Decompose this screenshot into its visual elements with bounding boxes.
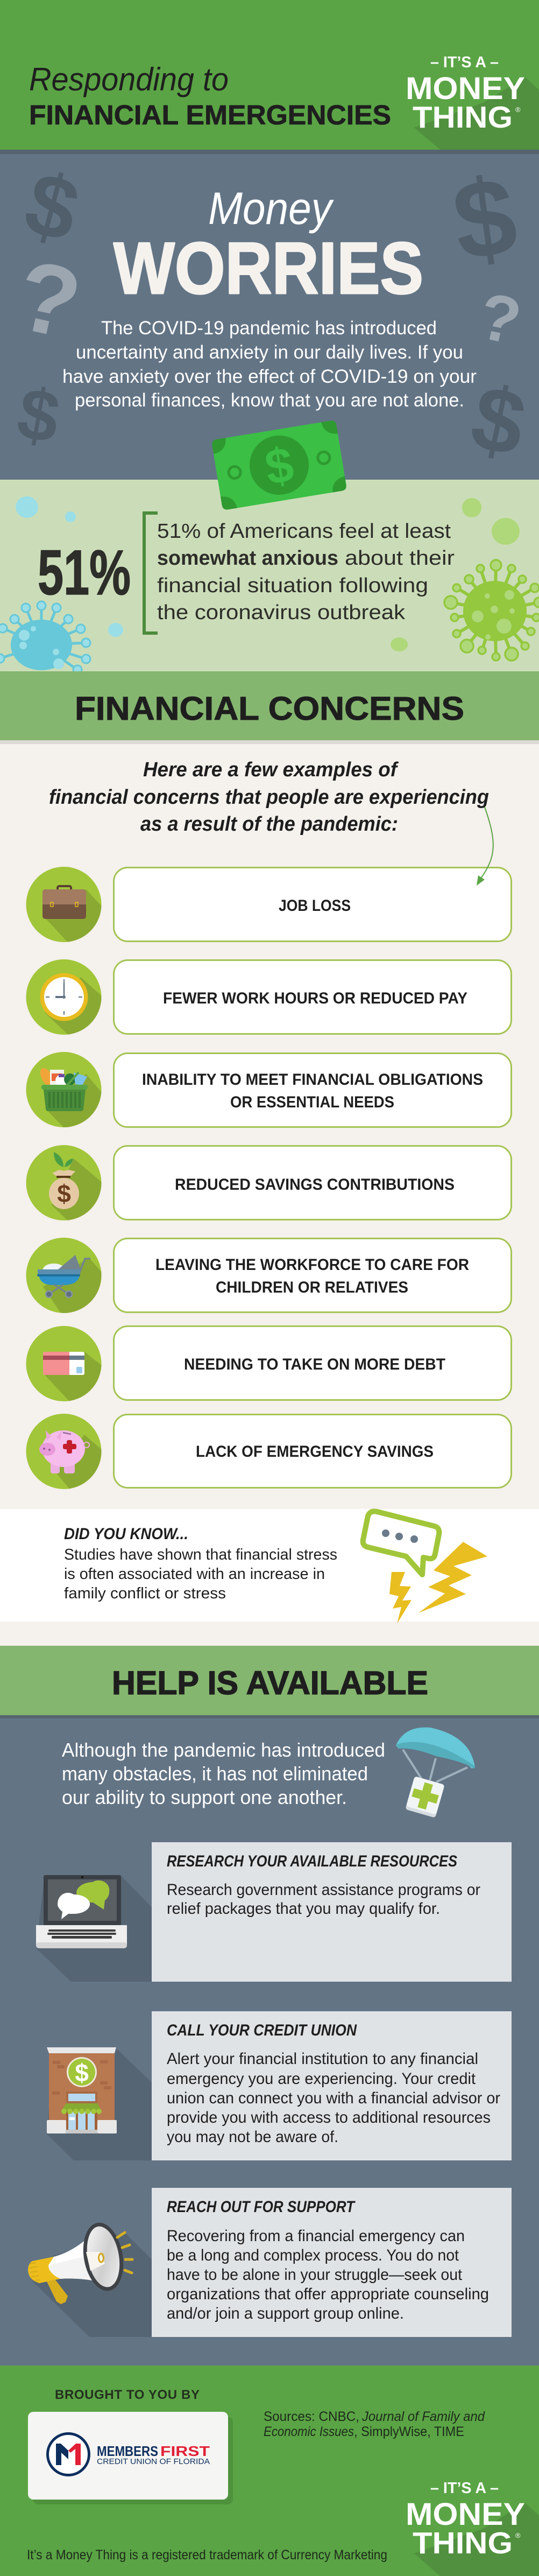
sources: , SimplyWise, TIME xyxy=(354,2424,464,2439)
decorative dollar signs and question marks: ? xyxy=(473,279,527,359)
intro text: financial concerns: financial concerns that people are experiencing xyxy=(49,786,489,809)
intro text: financial concerns: as a result of the pandemic: xyxy=(140,813,398,836)
card: needing more debt xyxy=(114,1326,511,1400)
intro paragraph: have anxiety over the effect of COVID-19 on your xyxy=(62,366,477,387)
intro paragraph: uncertainty and anxiety in our daily lives. If you xyxy=(76,342,463,363)
icon: laptop xyxy=(36,1875,152,1982)
icon: credit card xyxy=(26,1326,108,1402)
sources xyxy=(264,2409,485,2439)
card: lack of emergency savings: LACK OF EMERGENCY SAVINGS xyxy=(196,1443,434,1461)
icon: money bag xyxy=(26,1145,101,1220)
heading: money worries xyxy=(114,183,423,309)
credit union text xyxy=(167,2022,500,2146)
support text: organizations that offer appropriate counseling xyxy=(167,2285,489,2303)
statistic text xyxy=(157,520,455,624)
decorative dollar signs and question marks: $ xyxy=(12,372,66,459)
icon: dollar bill: $ xyxy=(261,437,297,495)
icon: credit union building: $ xyxy=(75,2059,89,2087)
intro text: help: our ability to support one another. xyxy=(62,1786,347,1808)
card: job loss: JOB LOSS xyxy=(279,897,351,915)
statistic text: financial situation following xyxy=(157,574,428,597)
card: inability to meet obligations: OR ESSENTIAL NEEDS xyxy=(230,1093,394,1111)
credit union text: union can connect you with a financial advisor or xyxy=(167,2089,500,2107)
intro text: financial concerns xyxy=(49,759,489,836)
decorative dollar signs and question marks: $ xyxy=(16,152,89,261)
did you know text xyxy=(64,1525,337,1602)
card: fewer hours: FEWER WORK HOURS OR REDUCED PAY xyxy=(163,989,467,1007)
decorative dollar signs and question marks: $ xyxy=(446,153,524,284)
icon: megaphone xyxy=(28,2220,152,2337)
heading band: help is available xyxy=(0,1646,539,1715)
research text: Research government assistance programs or xyxy=(167,1881,480,1899)
icon: dollar bill xyxy=(211,420,347,510)
bracket xyxy=(144,513,158,633)
logo: It's a Money Thing xyxy=(406,54,539,150)
icon: lightning bolts xyxy=(389,1542,487,1624)
credit union text: CALL YOUR CREDIT UNION xyxy=(167,2022,357,2039)
credit union text: provide you with access to additional resources xyxy=(167,2109,491,2126)
card: fewer hours xyxy=(114,960,511,1034)
support text: be a long and complex process. You do not xyxy=(167,2247,459,2264)
card: leaving the workforce: LEAVING THE WORKFORCE TO CARE FOR xyxy=(155,1256,469,1274)
intro paragraph: personal finances, know that you are not alone. xyxy=(75,390,464,411)
support text: have to be alone in your struggle—seek out xyxy=(167,2266,463,2284)
logo: It's a Money Thing footer: – IT’S A – xyxy=(430,2480,499,2497)
card: leaving the workforce xyxy=(114,1238,511,1312)
logo card: Members First: MEMBERS xyxy=(97,2443,158,2459)
icon: briefcase xyxy=(26,867,101,942)
logo card: Members First: CREDIT UNION OF FLORIDA xyxy=(97,2457,210,2466)
did you know text: DID YOU KNOW... xyxy=(64,1525,188,1543)
title: FINANCIAL EMERGENCIES xyxy=(29,100,391,130)
logo: It's a Money Thing: THING xyxy=(413,100,513,135)
statistic text: somewhat anxious xyxy=(157,547,338,570)
intro text: help xyxy=(62,1739,385,1808)
big number 51%: 51% xyxy=(38,537,131,608)
statistic text: 51% of Americans feel at least xyxy=(157,520,451,543)
panel: 51 percent statistic xyxy=(0,420,539,674)
card: inability to meet obligations: INABILITY TO MEET FINANCIAL OBLIGATIONS xyxy=(142,1071,483,1089)
icon: clock xyxy=(26,959,101,1035)
support text xyxy=(167,2198,489,2322)
panel: research resources xyxy=(36,1842,512,1982)
card: leaving the workforce: CHILDREN OR RELATIVES xyxy=(216,1279,408,1296)
research text xyxy=(167,1852,480,1918)
panel: did you know xyxy=(0,1509,539,1624)
statistic text: the coronavirus outbreak xyxy=(157,601,406,624)
support text: and/or join a support group online. xyxy=(167,2305,404,2322)
did you know text: is often associated with an increase in xyxy=(64,1566,325,1583)
logo: It's a Money Thing footer: MONEY xyxy=(406,2497,525,2532)
intro text: help: Although the pandemic has introduced xyxy=(62,1739,385,1761)
credit union text: Alert your financial institution to any financial xyxy=(167,2050,478,2068)
support text: REACH OUT FOR SUPPORT xyxy=(167,2198,356,2216)
card: lack of emergency savings xyxy=(114,1415,511,1488)
did you know text: Studies have shown that financial stress xyxy=(64,1546,337,1563)
did you know text: family conflict or stress xyxy=(64,1585,226,1602)
statistic text: about their xyxy=(345,547,455,570)
icon: parachute care package xyxy=(396,1728,475,1818)
sources: Economic Issues xyxy=(264,2424,354,2439)
intro paragraph xyxy=(62,318,477,411)
arrow xyxy=(477,807,493,886)
credit union text: emergency you are experiencing. Your credit xyxy=(167,2070,476,2088)
green dots xyxy=(391,498,520,651)
research text: RESEARCH YOUR AVAILABLE RESOURCES xyxy=(167,1852,457,1870)
title xyxy=(29,61,391,130)
panel: help section background xyxy=(0,1715,539,2366)
heading band: financial concerns xyxy=(0,671,539,744)
icon: speech bubble xyxy=(363,1511,439,1575)
panel: money worries xyxy=(0,152,539,480)
sources: Journal of Family and xyxy=(361,2409,485,2424)
trademark note: It’s a Money Thing is a registered trademark of Currency Marketing xyxy=(27,2547,387,2563)
logo card: Members First: FIRST xyxy=(160,2443,210,2459)
icon: money bag: $ xyxy=(57,1180,71,1208)
logo: It's a Money Thing: – IT’S A – xyxy=(430,54,499,71)
intro text: help: many obstacles, it has not eliminated xyxy=(62,1763,368,1785)
brought to you by label: BROUGHT TO YOU BY xyxy=(55,2388,200,2402)
research text: relief packages that you may qualify for. xyxy=(167,1900,440,1918)
heading: money worries: Money xyxy=(208,183,335,234)
logo: It's a Money Thing footer: THING xyxy=(413,2526,513,2560)
panel: header band xyxy=(0,0,539,154)
credit union text: you may not be aware of. xyxy=(167,2128,338,2146)
icon: credit union building xyxy=(47,2047,152,2160)
logo: It's a Money Thing: ® xyxy=(515,106,521,114)
title: Responding to xyxy=(29,61,229,97)
icon: green virus xyxy=(444,560,539,661)
decorative dollar signs and question marks: $ xyxy=(463,366,534,476)
icon: grocery basket xyxy=(26,1052,101,1127)
card: job loss xyxy=(114,868,511,941)
panel: reach out for support xyxy=(28,2188,512,2337)
icon: baby stroller xyxy=(26,1238,108,1315)
icon: piggy bank xyxy=(26,1414,108,1490)
heading band: help is available: HELP IS AVAILABLE xyxy=(112,1665,428,1701)
panel: call your credit union xyxy=(47,2011,512,2160)
support text: Recovering from a financial emergency can xyxy=(167,2227,465,2245)
card: reduced savings xyxy=(114,1146,511,1220)
decorative dollar signs and question marks: ? xyxy=(8,239,90,360)
panel: footer xyxy=(0,2366,539,2576)
blue dots xyxy=(16,496,123,637)
decorative dollar signs and question marks xyxy=(8,152,534,476)
heading: money worries: WORRIES xyxy=(114,227,423,309)
logo: It's a Money Thing footer: ® xyxy=(515,2531,521,2539)
card: inability to meet obligations xyxy=(114,1053,511,1127)
logo: It's a Money Thing footer xyxy=(406,2480,539,2576)
card: needing more debt: NEEDING TO TAKE ON MORE DEBT xyxy=(184,1356,445,1373)
logo: It's a Money Thing: MONEY xyxy=(406,71,525,106)
icon: blue virus xyxy=(0,601,90,674)
intro paragraph: The COVID-19 pandemic has introduced xyxy=(101,318,437,339)
logo card: Members First xyxy=(28,2412,233,2504)
sources: Sources: CNBC, xyxy=(264,2409,359,2424)
card: reduced savings: REDUCED SAVINGS CONTRIBUTIONS xyxy=(175,1176,455,1194)
intro text: financial concerns: Here are a few examples of xyxy=(143,759,399,781)
heading band: financial concerns: FINANCIAL CONCERNS xyxy=(75,690,464,727)
